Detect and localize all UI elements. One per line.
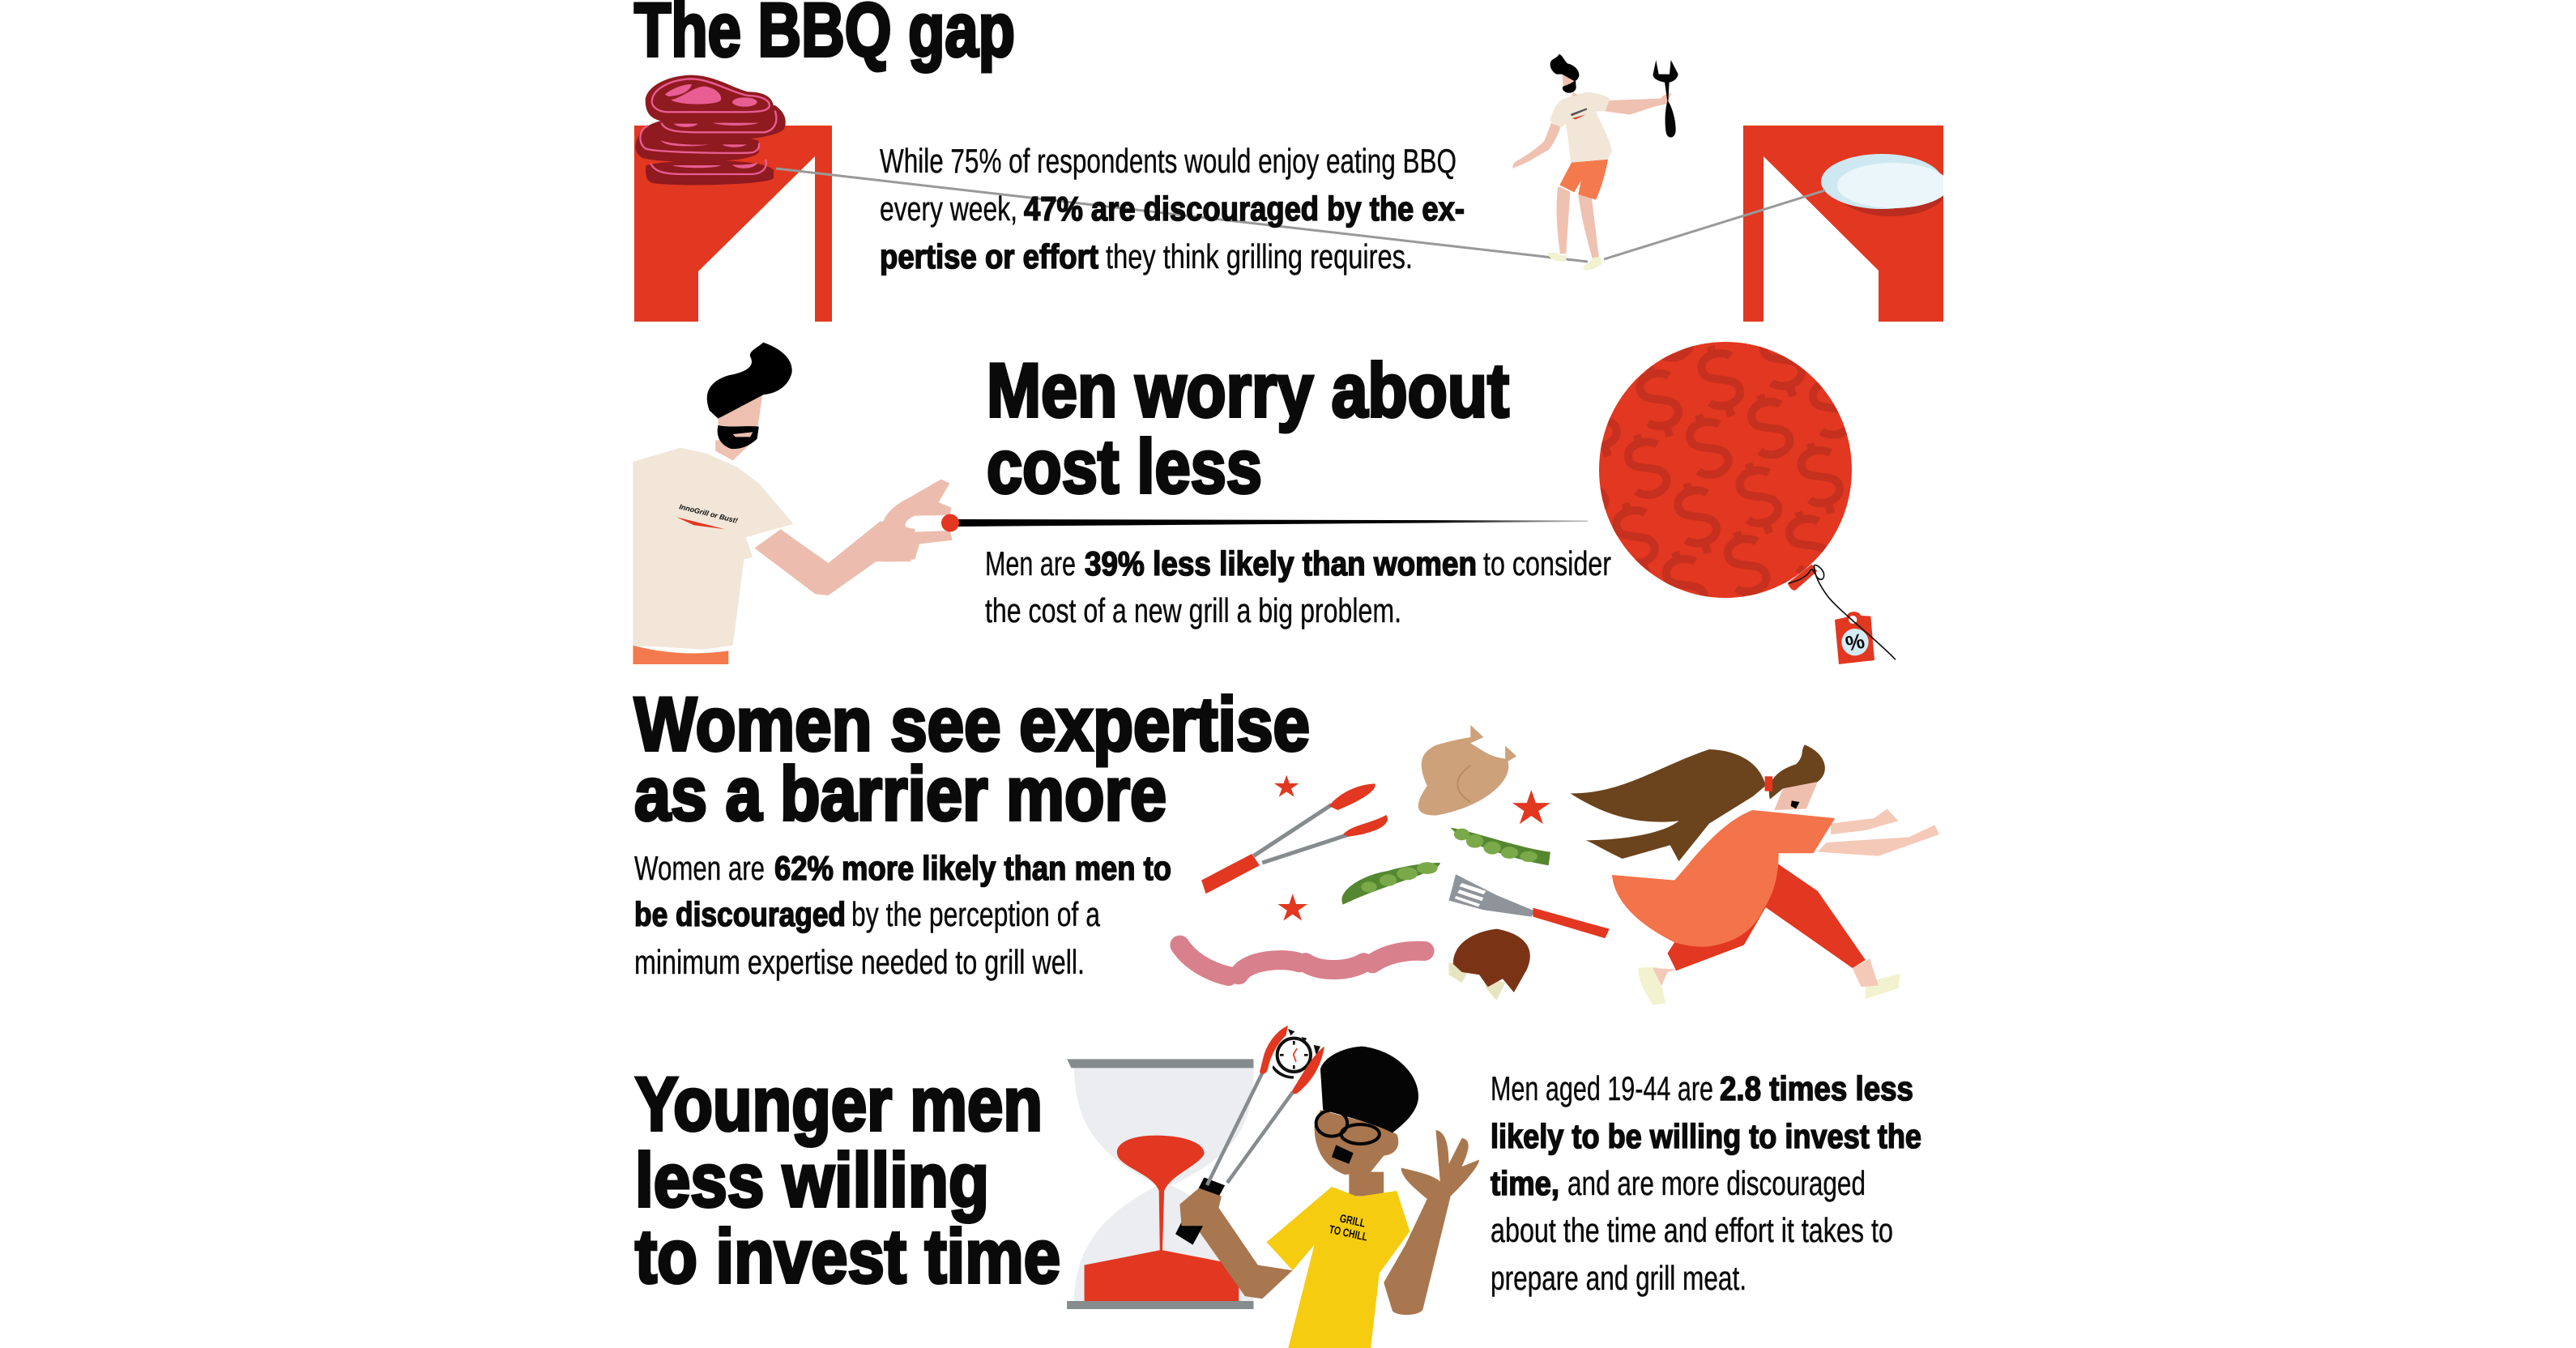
text block: BBQ gap statistic: every week,: [880, 190, 1017, 228]
heading: Younger men less willing to invest time: Younger men: [635, 1061, 1043, 1146]
illustration: flying food and running woman: [1179, 725, 1939, 1005]
text block: cost statistic: Men are: [985, 544, 1076, 582]
heading: Women see expertise as a barrier more: [634, 681, 1310, 836]
illustration: price tag on string: [1788, 565, 1896, 664]
text block: time statistic: likely to be willing to invest the: [1491, 1117, 1921, 1155]
heading: Younger men less willing to invest time: [635, 1061, 1060, 1299]
heading: Younger men less willing to invest time: less willing: [635, 1137, 989, 1222]
text block: time statistic: 2.8 times less: [1720, 1069, 1913, 1107]
text block: BBQ gap statistic: [880, 142, 1465, 275]
panel: younger men less willing to invest time: [635, 1026, 1921, 1348]
text block: time statistic: and are more discouraged: [1567, 1164, 1866, 1202]
figure: running woman: [1571, 744, 1939, 1005]
text block: expertise statistic: be discouraged: [634, 895, 846, 933]
text block: BBQ gap statistic: pertise or effort: [880, 237, 1098, 275]
text block: cost statistic: [985, 544, 1611, 629]
text block: time statistic: time,: [1491, 1164, 1559, 1202]
needle: [941, 514, 1588, 531]
text block: cost statistic: the cost of a new grill a big problem.: [985, 591, 1401, 629]
icons: stars: [1274, 775, 1550, 920]
heading: Men worry about cost less: cost less: [987, 424, 1262, 509]
illustration: man holding needle: [633, 343, 953, 664]
illustration: dollar balloon: [1599, 342, 1852, 598]
shirt text: grill to chill: [1328, 1209, 1371, 1243]
text block: time statistic: [1491, 1069, 1921, 1297]
heading: Women see expertise as a barrier more: as a barrier more: [634, 751, 1166, 836]
panel: men worry about cost less: [633, 342, 1896, 664]
illustration: price tag on string: %: [1844, 629, 1866, 656]
text block: BBQ gap statistic: 47% are discouraged by the ex-: [1024, 190, 1465, 228]
text block: expertise statistic: minimum expertise needed to grill well.: [634, 943, 1085, 981]
heading: Women see expertise as a barrier more: Women see expertise: [634, 681, 1310, 766]
text block: cost statistic: to consider: [1483, 544, 1611, 582]
shirt text: grill to chill: GRILL: [1339, 1211, 1367, 1230]
shirt logo swoosh: [676, 517, 725, 529]
shirt text: grill to chill: TO CHILL: [1328, 1222, 1369, 1243]
illustration: hourglass: [1067, 1059, 1253, 1309]
icon: left red table: [634, 126, 832, 322]
icon: tongs: [1201, 783, 1388, 894]
illustration: man on tightrope with fork: [1513, 54, 1678, 271]
icon: roast chicken: [1418, 725, 1516, 816]
tightrope: [776, 168, 1825, 262]
panel: women see expertise as a barrier: [634, 681, 1939, 1005]
text block: expertise statistic: [634, 849, 1171, 981]
icon: right red table with plate: [1743, 126, 1949, 322]
text block: BBQ gap statistic: While 75% of respondents would enjoy eating BBQ: [880, 142, 1456, 180]
panel: the BBQ gap: [634, 0, 1949, 322]
icon: sausages: [1179, 945, 1425, 976]
text block: expertise statistic: 62% more likely than men to: [774, 849, 1171, 887]
text block: time statistic: prepare and grill meat.: [1491, 1259, 1746, 1297]
icon: asparagus: [1341, 828, 1550, 905]
shirt logo text: InnoGrill or Bust!: [679, 502, 739, 525]
heading: Men worry about cost less: [987, 348, 1509, 509]
text block: time statistic: Men aged 19-44 are: [1491, 1069, 1713, 1107]
text block: expertise statistic: by the perception of a: [851, 895, 1100, 933]
illustration: stressed man with tongs: [1175, 1047, 1479, 1348]
heading: Men worry about cost less: Men worry about: [987, 348, 1509, 433]
text block: BBQ gap statistic: they think grilling requires.: [1106, 237, 1413, 275]
icon: tongs with stopwatch: [1207, 1026, 1324, 1185]
text block: time statistic: about the time and effort it takes to: [1491, 1211, 1893, 1249]
text block: expertise statistic: Women are: [634, 849, 765, 887]
heading: Younger men less willing to invest time: to invest time: [635, 1214, 1060, 1299]
icon: spatula: [1449, 874, 1610, 938]
icon: ribs: [1449, 929, 1530, 1000]
icon: stack of steaks: [635, 75, 786, 185]
text block: cost statistic: 39% less likely than women: [1085, 544, 1477, 582]
